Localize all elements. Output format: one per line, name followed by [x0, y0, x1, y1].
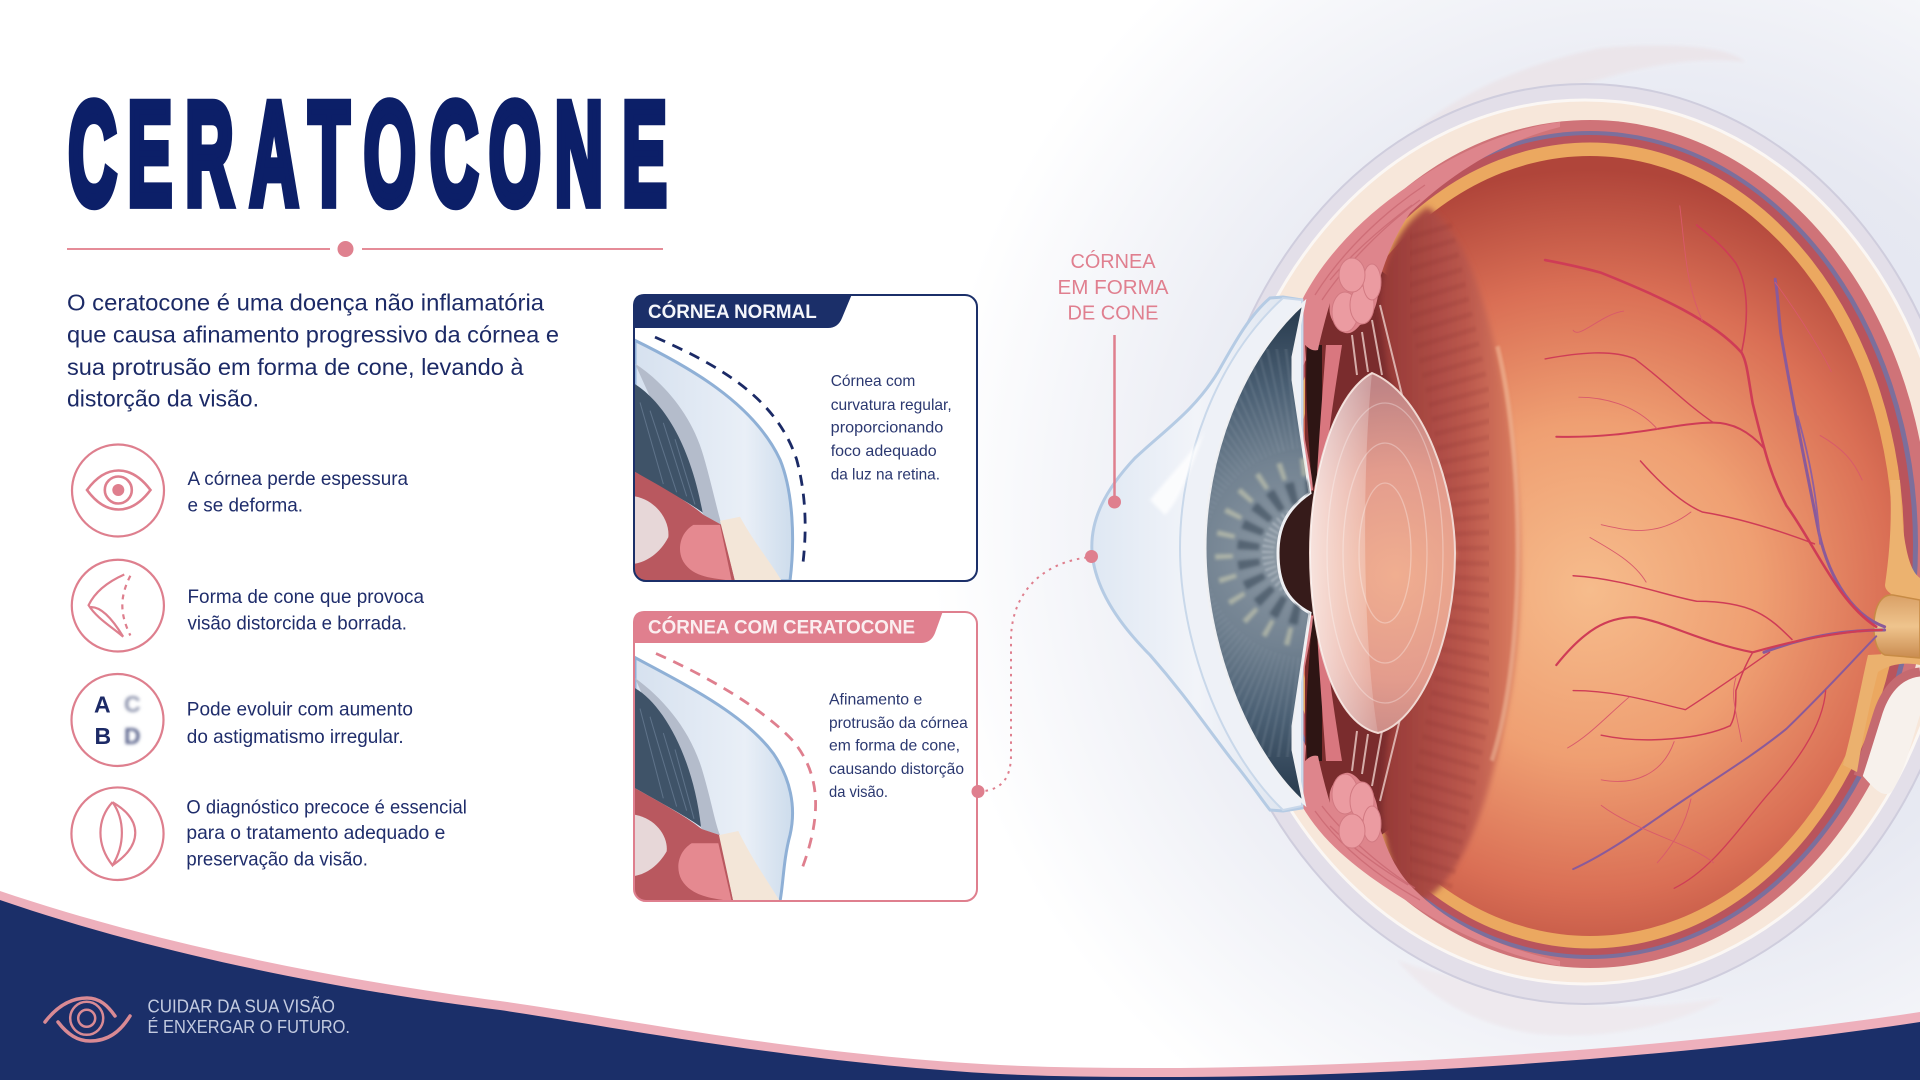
header label normal: CÓRNEA NORMAL — [648, 299, 817, 323]
icon: blurred letters: C — [124, 691, 141, 717]
text: diagnóstico precoce: O diagnóstico precoce é essencial — [186, 796, 467, 818]
extraocular muscle bottom — [1397, 960, 1723, 1035]
footer logo eye — [45, 998, 130, 1041]
intro paragraph — [67, 290, 559, 412]
text: córnea perde espessura: A córnea perde espessura — [188, 468, 408, 490]
icon: blurred letters: B — [94, 723, 111, 749]
callout label: EM FORMA — [1058, 277, 1169, 299]
header label cone: CÓRNEA COM CERATOCONE — [648, 614, 915, 638]
text: astigmatismo: Pode evoluir com aumento — [187, 698, 413, 720]
description normal: da luz na retina. — [831, 467, 940, 484]
text: forma de cone: Forma de cone que provoca — [188, 586, 424, 608]
text: forma de cone — [188, 586, 424, 635]
ciliary muscle bottom — [1291, 614, 1560, 966]
text: forma de cone: visão distorcida e borrada. — [188, 613, 407, 635]
iris crypts — [1236, 478, 1310, 626]
icon: blurred letters: D — [124, 723, 141, 749]
description cone — [829, 692, 968, 801]
retinal veins — [1545, 206, 1885, 888]
icon: eye — [72, 444, 164, 536]
muscle fibres — [1315, 185, 1425, 900]
panel: córnea com ceratocone — [633, 611, 977, 901]
intro paragraph: distorção da visão. — [67, 386, 259, 412]
description cone: causando distorção — [829, 761, 964, 778]
zonules — [1352, 305, 1402, 801]
upper sheath — [1885, 480, 1920, 603]
nerve stub — [1874, 595, 1920, 658]
sclera — [1215, 100, 1920, 984]
icon: cone — [72, 560, 164, 651]
card border — [634, 612, 977, 901]
title: CERATOCONE — [68, 73, 667, 235]
intro paragraph: O ceratocone é uma doença não inflamatória — [67, 290, 545, 316]
card background — [634, 612, 977, 901]
dark gaps behind iris — [1306, 345, 1322, 761]
text: diagnóstico precoce: preservação da visão. — [186, 848, 368, 870]
iris outer rays — [1224, 349, 1302, 757]
lens left reflection — [1310, 373, 1378, 733]
icon: blurred letters: A — [94, 692, 111, 718]
bottom wave band — [0, 891, 1920, 1080]
icon: lens — [71, 787, 164, 880]
description normal: Córnea com — [831, 373, 915, 390]
pink wave edge — [0, 891, 1920, 1080]
panel: córnea normal — [633, 294, 977, 581]
blue layer — [1262, 131, 1918, 959]
description normal: proporcionando — [831, 420, 943, 436]
ciliary muscle top — [1291, 122, 1560, 492]
red branches — [1545, 206, 1882, 888]
iris pale flecks — [1214, 456, 1307, 647]
intro paragraph: sua protrusão em forma de cone, levando à — [67, 354, 524, 380]
callout leader — [1113, 335, 1116, 502]
card border — [634, 295, 977, 581]
description normal: curvatura regular, — [831, 397, 952, 414]
cornea highlight — [1150, 430, 1205, 515]
text: astigmatismo — [187, 698, 413, 748]
description normal: foco adequado — [831, 443, 937, 460]
iris — [1206, 299, 1312, 807]
suspensory strands — [1316, 345, 1342, 761]
description normal — [831, 373, 952, 484]
iris fine rays — [1262, 510, 1289, 594]
lower cream tissue — [1862, 668, 1920, 794]
optic nerve area — [1843, 480, 1920, 794]
text: córnea perde espessura — [188, 468, 408, 517]
title divider — [67, 241, 663, 257]
purple trunks — [1573, 279, 1885, 869]
cornea cone — [1092, 297, 1302, 811]
callout dot — [1108, 496, 1121, 508]
icon: blurred letters — [72, 674, 164, 766]
extraocular muscle top — [1395, 45, 1745, 148]
text: diagnóstico precoce — [186, 796, 467, 870]
callout: córnea em forma de cone — [1058, 250, 1169, 508]
ribs — [1422, 231, 1478, 882]
pale crescent — [1492, 346, 1518, 761]
text: astigmatismo: do astigmatismo irregular. — [187, 726, 404, 748]
description cone: protrusão da córnea — [829, 715, 968, 732]
callout label — [1058, 250, 1169, 324]
text: córnea perde espessura: e se deforma. — [188, 495, 303, 517]
card background — [634, 295, 977, 581]
footer slogan: É ENXERGAR O FUTURO. — [148, 1017, 350, 1037]
callout label: DE CONE — [1068, 302, 1158, 324]
lens — [1310, 373, 1455, 733]
lens rings — [1327, 403, 1443, 703]
description cone: em forma de cone, — [829, 738, 960, 755]
choroid — [1250, 120, 1920, 968]
cornea inner band — [1180, 298, 1302, 810]
dashed curvature cone — [656, 653, 816, 874]
dashed curvature normal — [655, 337, 805, 566]
red layer — [1267, 135, 1913, 955]
cornea illustration normal — [635, 340, 793, 581]
pupil — [1278, 491, 1350, 615]
lower orange sheath — [1843, 652, 1920, 772]
header tab cone — [633, 611, 943, 643]
posterior chamber shade — [1305, 270, 1440, 836]
footer slogan: CUIDAR DA SUA VISÃO — [148, 996, 335, 1017]
orange layer — [1276, 142, 1904, 948]
ciliary lumps — [1332, 258, 1381, 848]
header tab normal — [633, 294, 852, 328]
footer slogan — [148, 996, 350, 1037]
description cone: da visão. — [829, 784, 888, 801]
cornea illustration cone — [635, 658, 793, 901]
description cone: Afinamento e — [829, 692, 922, 708]
ribbed band — [1380, 207, 1521, 901]
text: diagnóstico precoce: para o tratamento adequado e — [186, 822, 445, 844]
lower red layer — [1858, 672, 1920, 776]
outer lilac layer — [1200, 84, 1920, 1004]
callout label: CÓRNEA — [1070, 250, 1156, 273]
navy wave — [0, 900, 1920, 1080]
eye anatomy illustration — [1092, 45, 1920, 1035]
intro paragraph: que causa afinamento progressivo da córnea e — [67, 322, 559, 348]
connector: panel to cornea — [972, 550, 1098, 798]
retina cavity — [1287, 156, 1893, 936]
ciliary band group — [1380, 207, 1521, 901]
